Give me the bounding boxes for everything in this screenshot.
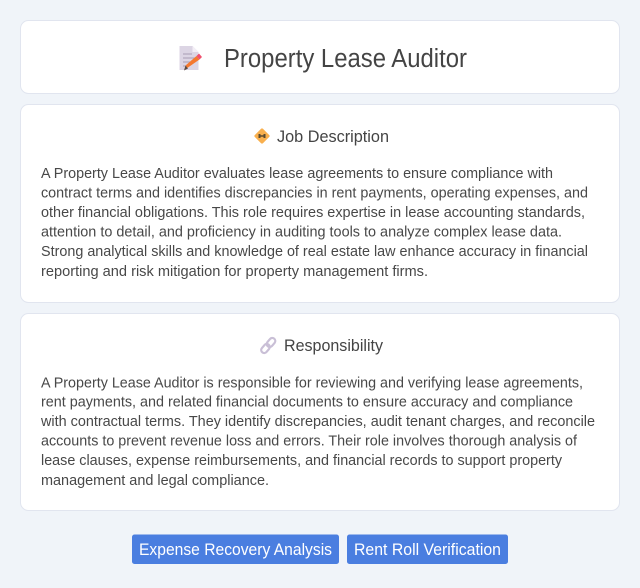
job description paragraph: attention to detail, and proficiency in auditing tools to analyze complex lease data. [41, 224, 562, 240]
responsibility paragraph: accounts to prevent revenue loss and errors. Their role involves thorough analysis of [41, 434, 578, 450]
responsibility paragraph: A Property Lease Auditor is responsible for reviewing and verifying lease agreements, [41, 376, 583, 392]
job description paragraph: other financial obligations. This role requires expertise in lease accounting standards, [41, 205, 585, 221]
panel: title [20, 20, 620, 94]
heading: job description: Job Description [277, 128, 389, 146]
tag: rent roll verification [347, 534, 508, 564]
responsibility paragraph: with contractual terms. They identify discrepancies, audit tenant charges, and reconcile [40, 414, 595, 430]
tag: expense recovery analysis [132, 534, 339, 564]
job description paragraph: reporting and risk mitigation for property management firms. [41, 264, 428, 280]
tag: rent roll verification: Rent Roll Verification [354, 541, 501, 559]
icon: document with pencil [180, 46, 202, 70]
responsibility paragraph: rent payments, and related financial documents to ensure accuracy and compliance [41, 394, 573, 410]
responsibility paragraph: management and legal compliance. [41, 473, 269, 489]
title text: Property Lease Auditor [224, 45, 467, 73]
job description paragraph: contract terms and identifies discrepancies in rent payments, operating expenses, and [41, 186, 588, 202]
job description paragraph: Strong analytical skills and knowledge of real estate law enhance accuracy in financial [41, 244, 588, 260]
icon: orange diamond [254, 128, 270, 144]
icon: chain link [260, 337, 277, 354]
heading: responsibility: Responsibility [284, 337, 384, 355]
panel: job description [20, 104, 620, 302]
responsibility paragraph [40, 376, 595, 489]
job description paragraph: A Property Lease Auditor evaluates lease agreements to ensure compliance with [41, 166, 553, 182]
panel: responsibility [20, 314, 620, 510]
tag: expense recovery analysis: Expense Recovery Analysis [139, 541, 332, 559]
responsibility paragraph: lease clauses, expense reimbursements, and financial records to support property [41, 453, 563, 469]
job description paragraph [41, 166, 588, 280]
